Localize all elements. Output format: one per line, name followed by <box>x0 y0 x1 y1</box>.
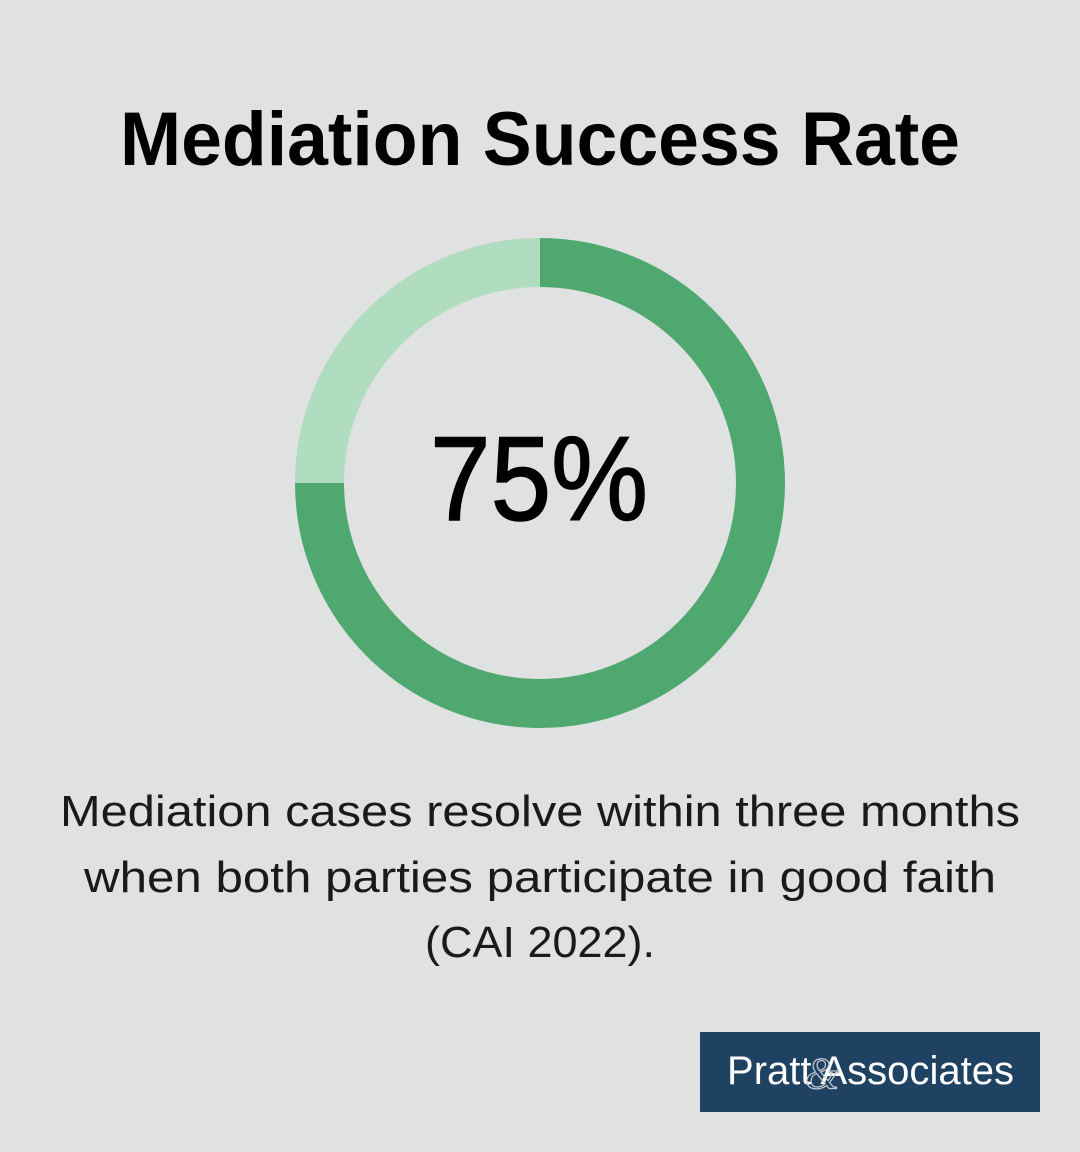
logo: Pratt & Associates: & <box>805 1049 840 1098</box>
percentage value: 75% <box>430 412 648 546</box>
description text: Mediation cases resolve within three months <box>60 787 1020 836</box>
donut chart <box>320 262 760 704</box>
logo: Pratt & Associates: Pratt Associates <box>727 1049 1014 1093</box>
description text <box>60 787 1020 967</box>
description text: when both parties participate in good faith <box>83 853 996 902</box>
donut remainder segment <box>320 262 540 483</box>
title: Mediation Success Rate <box>120 97 960 182</box>
donut success segment <box>320 262 760 704</box>
description text: (CAI 2022). <box>425 918 655 967</box>
logo: Pratt & Associates <box>700 1032 1040 1112</box>
